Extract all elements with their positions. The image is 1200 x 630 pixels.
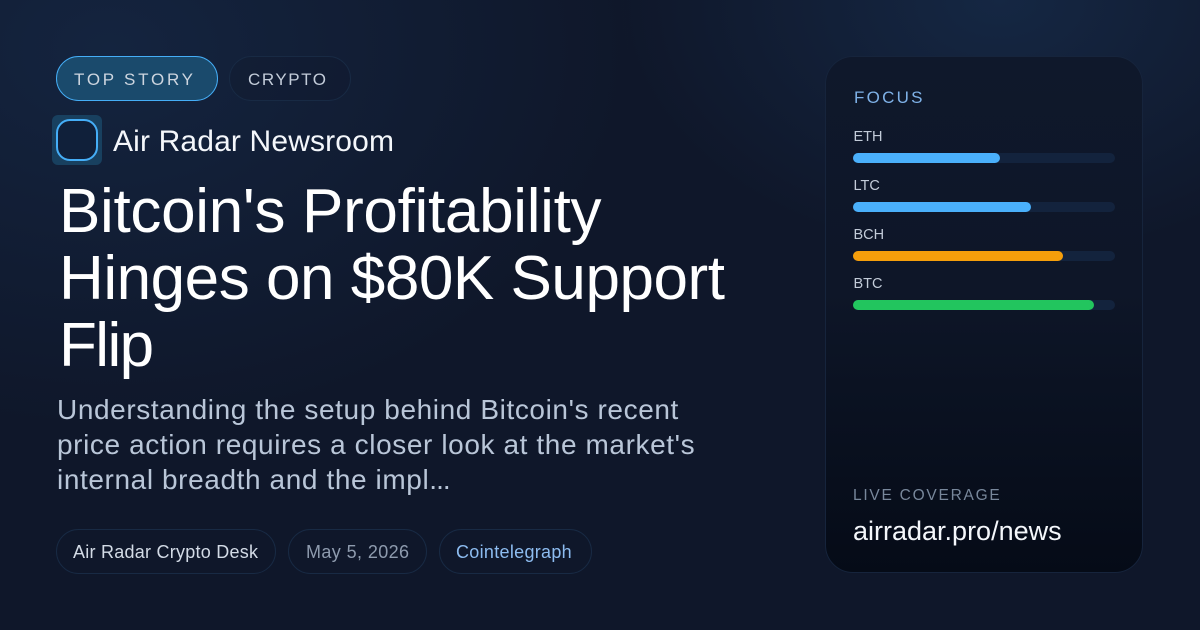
icon: brand logo square bbox=[52, 115, 102, 165]
bar: BTC: BTC bbox=[854, 276, 882, 292]
meta pill: desk bbox=[56, 529, 276, 574]
focus heading: FOCUS bbox=[854, 88, 925, 107]
tag: crypto bbox=[229, 56, 351, 101]
bar: ETH bbox=[853, 129, 1115, 163]
headline: Flip bbox=[59, 311, 153, 380]
bar: BCH: BCH bbox=[854, 227, 884, 243]
panel: focus bbox=[825, 56, 1143, 573]
summary text: Understanding the setup behind Bitcoin's recent bbox=[57, 394, 679, 425]
meta pill: source bbox=[439, 529, 592, 574]
brand name: Air Radar Newsroom bbox=[113, 125, 394, 158]
bar: BTC bbox=[853, 276, 1115, 310]
site url: airradar.pro/news bbox=[853, 516, 1062, 546]
bar: LTC: LTC bbox=[854, 178, 880, 194]
summary text bbox=[57, 394, 695, 495]
meta pill: desk: Air Radar Crypto Desk bbox=[73, 542, 258, 562]
summary text: price action requires a closer look at the market's bbox=[57, 429, 695, 460]
headline: Hinges on $80K Support bbox=[59, 244, 724, 313]
meta pill: date bbox=[288, 529, 427, 574]
headline: Bitcoin's Profitability bbox=[59, 177, 601, 246]
meta pill: source: Cointelegraph bbox=[456, 542, 572, 562]
tag: top story bbox=[56, 56, 218, 101]
tag: top story: TOP STORY bbox=[74, 70, 196, 89]
bar: LTC bbox=[853, 178, 1115, 212]
bar: BCH bbox=[853, 227, 1115, 261]
live coverage label: LIVE COVERAGE bbox=[853, 487, 1002, 504]
bar: ETH: ETH bbox=[854, 129, 882, 145]
summary text: internal breadth and the impl... bbox=[57, 464, 450, 495]
meta pill: date: May 5, 2026 bbox=[306, 542, 409, 562]
tag: crypto: CRYPTO bbox=[248, 70, 328, 89]
headline bbox=[59, 177, 725, 380]
